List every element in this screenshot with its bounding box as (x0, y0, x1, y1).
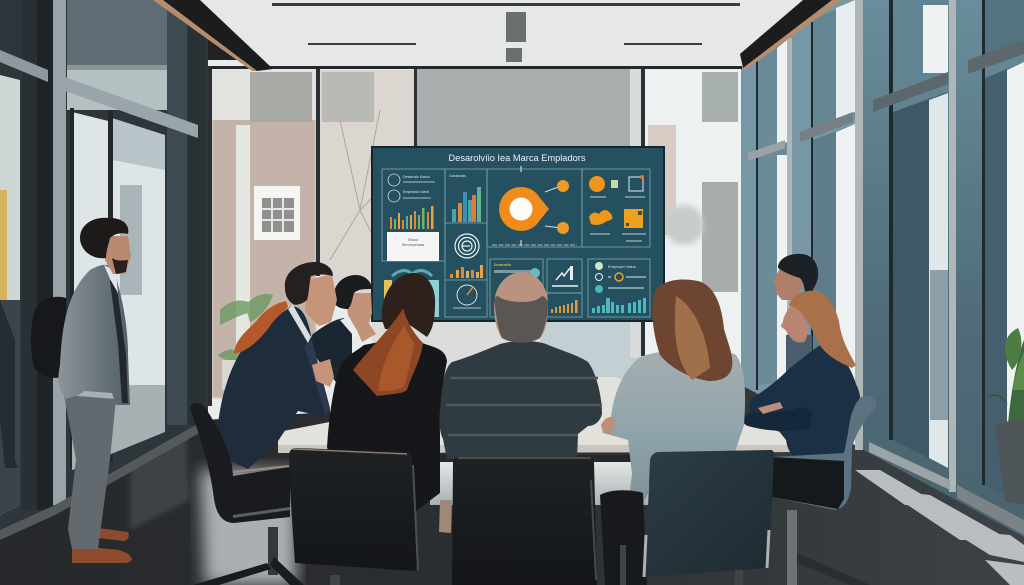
red ponytail (353, 308, 423, 396)
center column bar chart (449, 174, 481, 222)
front chair left (289, 448, 418, 571)
black jacket (327, 337, 447, 523)
wall display (372, 147, 664, 321)
face (105, 236, 131, 274)
left glass wall (0, 0, 208, 540)
person outside reflection (0, 300, 18, 468)
shirt (439, 341, 602, 459)
standing man (31, 218, 132, 563)
light top (610, 349, 745, 508)
hair (80, 218, 128, 258)
second seated man (310, 275, 376, 382)
gauge icon (453, 285, 481, 308)
teal bar chart (592, 298, 646, 313)
right glass wall (741, 0, 1024, 537)
front chair center (452, 457, 597, 585)
right outside building (645, 70, 741, 400)
backpack (31, 297, 68, 378)
small bar chart (450, 265, 483, 278)
right chair (772, 396, 877, 585)
face (345, 293, 372, 329)
small plant behind (218, 294, 273, 390)
ceiling (153, 0, 842, 71)
trousers (64, 395, 116, 549)
jacket (310, 318, 352, 382)
hair fringe (494, 296, 548, 342)
left bar chart (390, 206, 434, 229)
trousers (600, 490, 647, 585)
panel outlines (382, 169, 650, 317)
window panes (758, 0, 1024, 505)
woman at the right (743, 291, 860, 460)
right lower tile: Employer Value (608, 264, 637, 269)
bald man from behind (439, 272, 602, 459)
back window view (200, 60, 760, 460)
hair (334, 275, 372, 309)
jacket (58, 265, 130, 405)
transom bars (0, 50, 48, 82)
front chair right (644, 450, 774, 577)
pane dark edges (756, 0, 985, 485)
dark columns (22, 0, 52, 510)
sun stripes on the floor (855, 470, 1024, 585)
face (781, 306, 807, 343)
table (278, 377, 797, 462)
lower center tiles (494, 263, 578, 287)
far left glass (0, 75, 20, 515)
right panel icons (589, 175, 646, 241)
floor reflections (130, 425, 650, 585)
sill (869, 442, 950, 490)
upper glass (67, 0, 167, 110)
white card: Brand (408, 238, 418, 242)
horizontal bars (748, 40, 1024, 161)
woman with brown hair from behind (600, 280, 745, 585)
lower center tiles: Desarrollo (494, 263, 511, 267)
center wall column (372, 68, 641, 390)
chair legs at bottom (330, 545, 743, 585)
left icons and text: Empleador clave (403, 190, 429, 194)
brick building (212, 70, 416, 398)
hand (312, 359, 334, 387)
hair top (382, 273, 435, 337)
base wall (741, 0, 1024, 537)
dark hair (285, 262, 333, 305)
white card: Recompensas (402, 243, 424, 247)
center column bar chart: Ganancias (449, 174, 466, 178)
man at the far right (773, 254, 818, 375)
hair (652, 280, 732, 381)
spiral icon (455, 234, 479, 258)
right lower tile (595, 262, 646, 293)
shoes (72, 528, 132, 563)
floor (0, 385, 1024, 585)
left icons and text: Desarrollo Marca (403, 175, 430, 179)
left chair (190, 403, 304, 585)
window frames (208, 66, 645, 406)
display title: Desarolvíio Iea Marca Empladors (448, 153, 586, 164)
left icons and text (388, 174, 435, 202)
woman in black from behind (327, 273, 452, 533)
jacket (749, 344, 860, 460)
door glass (72, 112, 165, 470)
hair (789, 291, 856, 368)
light mullions (787, 0, 956, 492)
potted plant right (980, 328, 1024, 505)
face (305, 274, 337, 326)
orange donut diagram (492, 166, 577, 246)
white card (387, 232, 439, 261)
orange ponytail (234, 301, 288, 354)
sill (0, 418, 208, 540)
navy jacket (218, 307, 330, 469)
seated person with ponytail (218, 262, 337, 469)
head (494, 272, 548, 342)
knee (439, 500, 452, 533)
hand (356, 322, 376, 342)
orange trend bars (551, 300, 578, 313)
lower-left tile (384, 270, 439, 317)
